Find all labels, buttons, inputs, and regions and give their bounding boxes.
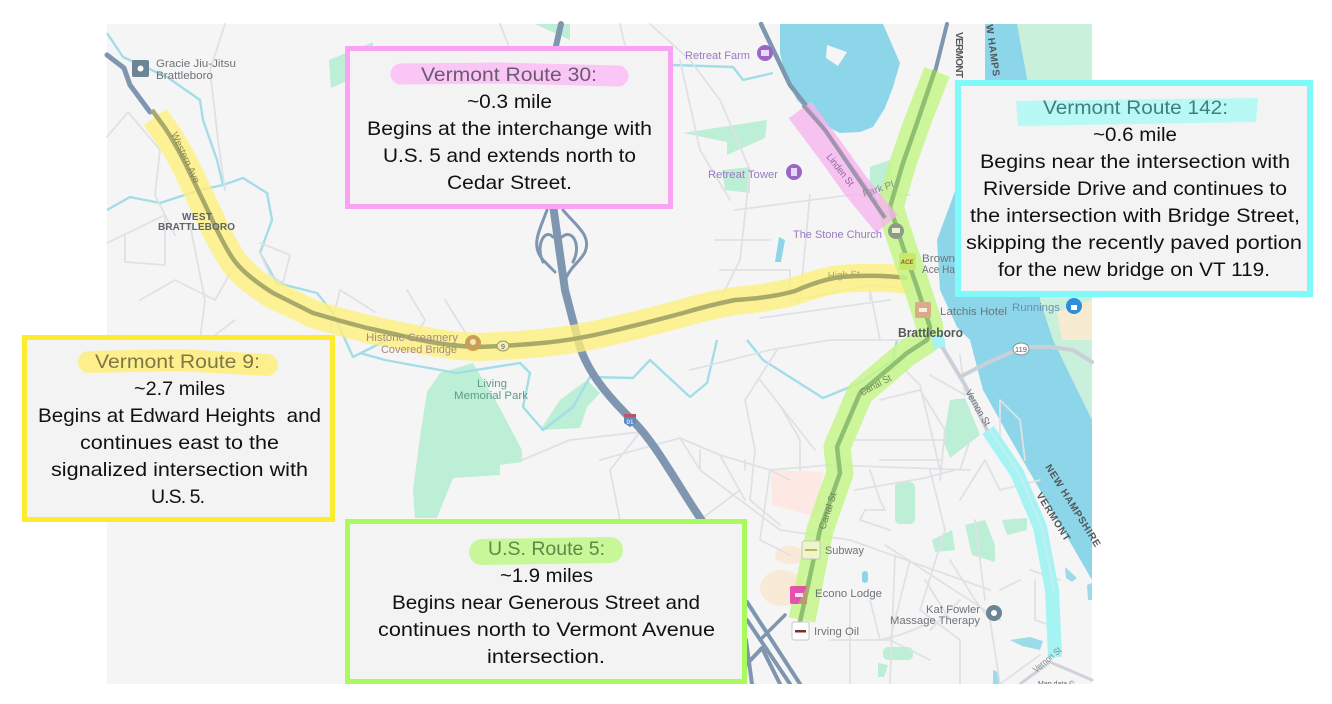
text: route 9 description: signalized intersection with xyxy=(51,459,308,481)
text: route 142 description: skipping the recently paved portion xyxy=(966,232,1302,254)
map labels: Western Ave xyxy=(168,131,202,186)
map labels xyxy=(156,24,1102,688)
map labels: Park Pl xyxy=(862,180,895,200)
text: US 5 description: Begins near Generous Street and xyxy=(392,592,700,614)
map labels: Ace Ha xyxy=(922,264,956,276)
text: US 5 description xyxy=(378,565,715,668)
heading: U.S. Route 5: U.S. Route 5: xyxy=(488,538,605,560)
map labels: Brattleboro xyxy=(156,70,213,82)
text: route 142 description: for the new bridge on VT 119. xyxy=(998,259,1270,281)
map labels: Retreat Farm xyxy=(685,50,750,62)
map labels: Memorial Park xyxy=(454,390,529,402)
text: route 9 description xyxy=(38,378,321,508)
highlight: route 9 heading xyxy=(89,360,267,365)
map labels: Kat Fowler xyxy=(926,604,980,616)
panel: Vermont Route 142 xyxy=(958,83,1310,294)
map labels: Canal St xyxy=(858,373,894,399)
text: route 9 description: continues east to the xyxy=(80,432,279,454)
map labels: Econo Lodge xyxy=(815,588,882,600)
pin: Stone Church xyxy=(888,223,904,239)
map labels: Latchis Hotel xyxy=(940,306,1007,318)
text: route 142 description: ~0.6 mile xyxy=(1093,124,1177,146)
text: route 142 description xyxy=(966,124,1302,281)
shield: I-91 xyxy=(624,414,636,427)
interstate 91 xyxy=(107,24,947,684)
highlight: US 5 heading xyxy=(482,550,610,552)
icon: Irving Oil xyxy=(792,622,809,640)
map labels: High St xyxy=(828,269,860,282)
streams xyxy=(107,33,897,430)
pin: Historic Creamery xyxy=(465,335,481,351)
shield: route 119: 119 xyxy=(1015,345,1027,354)
map labels: Vernon St xyxy=(962,388,992,428)
text: US 5 description: ~1.9 miles xyxy=(500,565,593,587)
icon: Latchis Hotel xyxy=(915,302,931,318)
icon: Subway xyxy=(802,541,820,559)
panel: Vermont Route 30 xyxy=(348,48,670,206)
map labels: VERMONT xyxy=(1033,491,1072,543)
map labels: Massage Therapy xyxy=(890,615,980,627)
parks xyxy=(329,24,1027,677)
map labels: NEW HAMPSHIRE xyxy=(1042,463,1102,549)
streets xyxy=(107,24,1060,684)
pin: Retreat Farm xyxy=(757,45,773,61)
map labels: Gracie Jiu-Jitsu xyxy=(156,58,236,70)
text: route 30 description: ~0.3 mile xyxy=(467,91,552,113)
map labels: Map data © xyxy=(1038,680,1075,688)
text: route 142 description: Riverside Drive and continues to xyxy=(983,178,1287,200)
text: route 30 description: Cedar Street. xyxy=(447,172,572,194)
major grey roads xyxy=(938,340,1092,684)
map labels: The Stone Church xyxy=(793,229,882,241)
heading: Vermont Route 9: Vermont Route 9: xyxy=(95,351,260,373)
text: US 5 description: intersection. xyxy=(487,646,605,668)
highlight: Vermont Route 30 xyxy=(800,105,887,224)
beige commercial areas xyxy=(760,470,823,606)
text: route 142 description: Begins near the intersection with xyxy=(980,151,1290,173)
highlight: route 142 heading xyxy=(1016,98,1258,126)
text: US 5 description: continues north to Vermont Avenue xyxy=(378,619,715,641)
panel: Vermont Route 9 xyxy=(24,338,332,520)
text: route 30 description: Begins at the interchange with xyxy=(367,118,652,140)
pin: Kat Fowler xyxy=(986,605,1002,621)
icon: Ace: ACE xyxy=(900,260,914,266)
map labels: Linden St xyxy=(824,152,856,189)
water and land areas xyxy=(440,24,1092,684)
map labels: Canal St xyxy=(817,491,840,531)
highlight: route 30 heading xyxy=(401,73,618,76)
map labels: Historic Creamery xyxy=(366,332,459,344)
text: route 9 description: U.S. 5. xyxy=(151,486,205,508)
map labels: Subway xyxy=(825,545,864,557)
pin: Gracie Jiu-Jitsu xyxy=(132,60,149,77)
icon: Ace xyxy=(899,253,916,270)
text: route 30 description: U.S. 5 and extends north to xyxy=(383,145,636,167)
text: route 142 description: the intersection with Bridge Street, xyxy=(970,205,1300,227)
map labels: Brown xyxy=(922,253,955,265)
highlight: U.S. Route 5 xyxy=(800,70,937,622)
map labels: W HAMPS xyxy=(983,24,1001,77)
pin: Retreat Tower xyxy=(786,164,802,180)
map pins and icons xyxy=(132,45,1082,640)
highlight: Vermont Route 142 xyxy=(937,335,1055,657)
map labels: Living xyxy=(477,378,507,390)
map labels: VERMONT xyxy=(953,32,964,78)
map labels: Irving Oil xyxy=(814,626,859,638)
map labels: Covered Bridge xyxy=(381,344,457,356)
map labels: WEST xyxy=(182,212,212,223)
text: route 30 description xyxy=(367,91,652,194)
map labels: Vernon St xyxy=(1031,645,1064,675)
pin: Runnings xyxy=(1066,298,1082,314)
shield: route 9: 9 xyxy=(501,344,505,351)
map labels: BRATTLEBORO xyxy=(158,222,235,233)
map of Brattleboro xyxy=(107,24,1102,688)
map labels: Brattleboro xyxy=(898,326,963,340)
shield: I-91: 91 xyxy=(626,419,634,426)
text: route 9 description: Begins at Edward Heights and xyxy=(38,405,321,427)
shield: route 9 xyxy=(497,341,509,351)
heading: Vermont Route 30: Vermont Route 30: xyxy=(421,64,597,86)
highlight: Vermont Route 9 xyxy=(152,110,912,347)
panel: U.S. Route 5 xyxy=(348,522,744,682)
text: route 9 description: ~2.7 miles xyxy=(134,378,225,400)
heading: Vermont Route 142: Vermont Route 142: xyxy=(1043,97,1228,119)
icon: Econo Lodge xyxy=(790,586,807,604)
map labels: Runnings xyxy=(1012,302,1061,314)
shield: route 119 xyxy=(1013,343,1029,355)
map labels: Retreat Tower xyxy=(708,169,778,181)
